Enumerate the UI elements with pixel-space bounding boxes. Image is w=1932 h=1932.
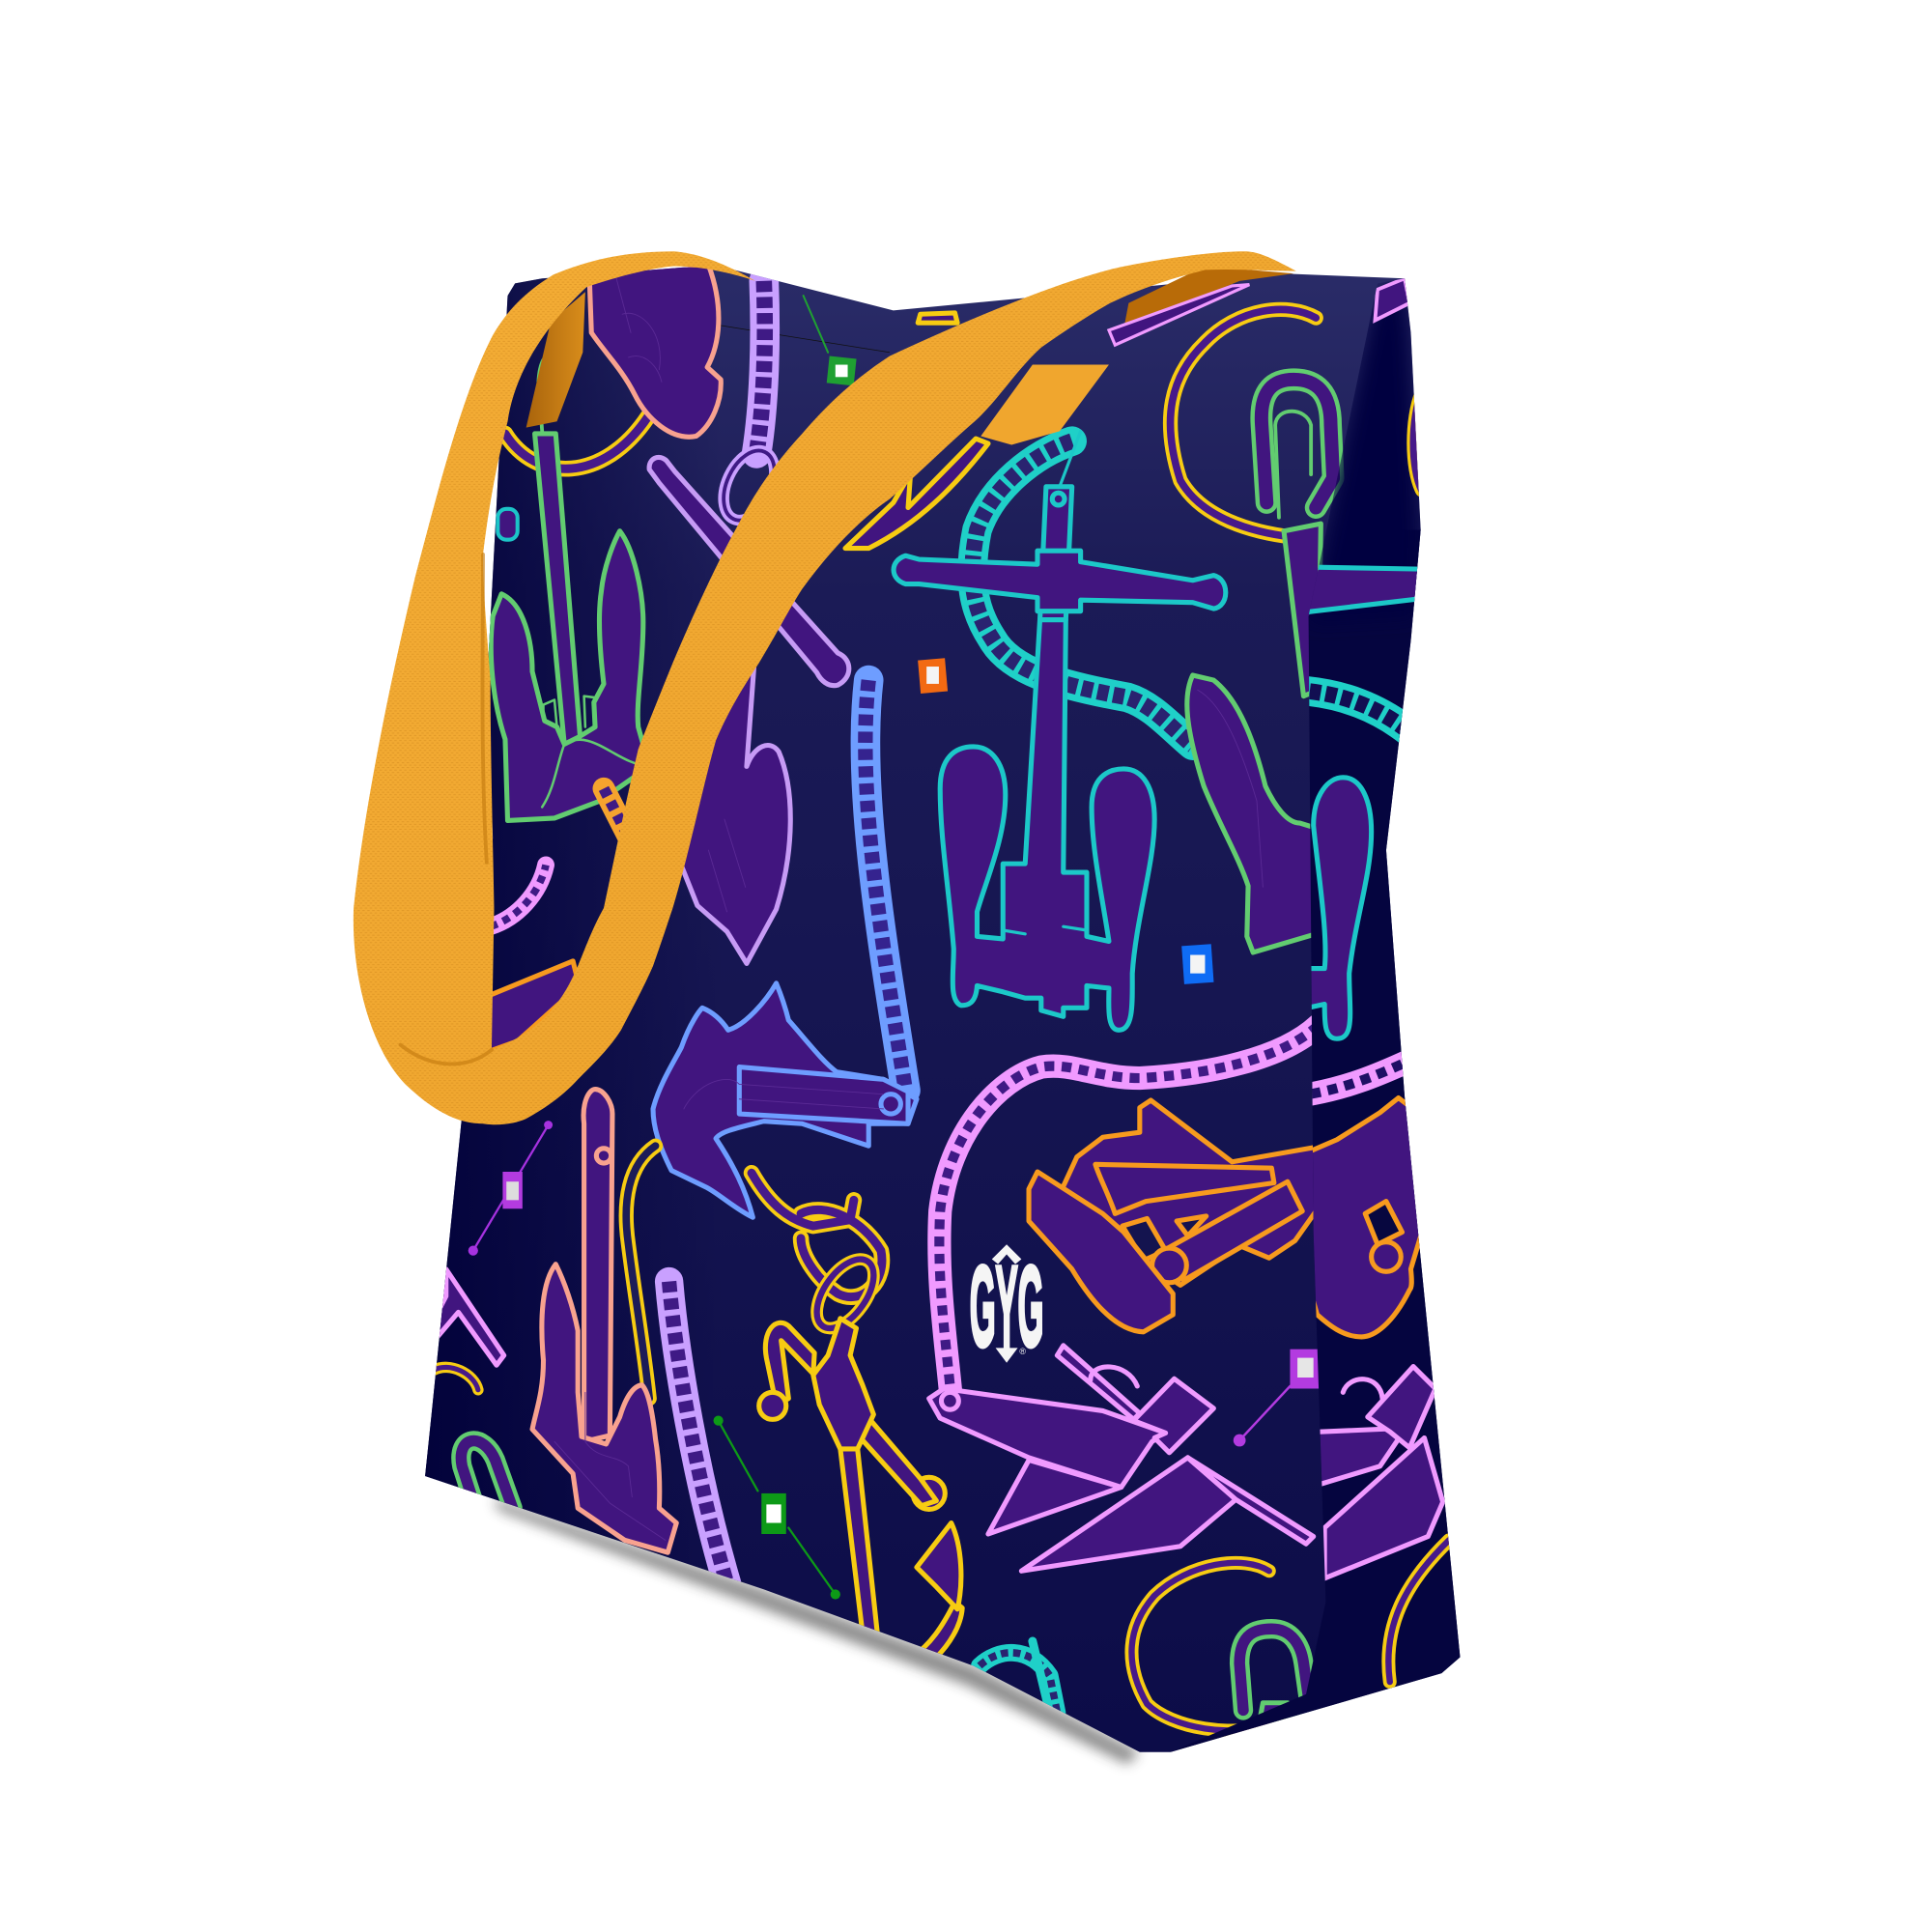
rope: gold lasso bottom (1131, 1563, 1282, 1731)
anchor: green right (1187, 675, 1316, 952)
chain: orange behind strap (604, 788, 639, 856)
side: plow anchor (1293, 1367, 1443, 1578)
anchor: lilac stock (649, 457, 849, 686)
marker: orange square (918, 658, 948, 694)
pink trim under strap (1109, 285, 1249, 345)
side: pink chain (1293, 1057, 1417, 1096)
shackle: green bottom (1239, 1629, 1309, 1722)
icon: teal link (497, 509, 518, 540)
anchor: salmon bottom (532, 1090, 676, 1552)
anchor: salmon top (589, 265, 721, 437)
chain: teal bottom knot (980, 1641, 1057, 1713)
bag front panel (425, 265, 1460, 1762)
marker: blue square (1181, 944, 1213, 984)
side: pink top (1375, 278, 1409, 321)
right strap tab (980, 365, 1109, 444)
side: gold rope bottom (1388, 1540, 1449, 1682)
chain: blue (866, 680, 905, 1091)
side: teal fluke (1296, 778, 1372, 1038)
logo: ® (1019, 1347, 1026, 1356)
logo: GYG (970, 1243, 1043, 1371)
marker: purple square left (469, 1121, 553, 1256)
rope: upper left gold (505, 416, 648, 469)
bag side gusset (1171, 278, 1460, 1752)
side: orange anchor (1293, 1097, 1430, 1337)
side: gold rope (1413, 392, 1422, 491)
marker: green bottom square (714, 1416, 840, 1600)
shackle: green bottom left (461, 1441, 513, 1508)
anchor: pink plow (929, 1346, 1314, 1571)
anchor: orange (1029, 1100, 1316, 1332)
main orange strap (354, 251, 1296, 1124)
rope: small gold (434, 1367, 478, 1390)
tote bag illustration (354, 251, 1461, 1770)
shackle: green right (1262, 380, 1333, 696)
strap underside back piece (1123, 267, 1293, 329)
front panel anchor pattern (431, 265, 1333, 1731)
side gusset anchor pattern (1293, 278, 1449, 1682)
chain: pink (939, 1025, 1319, 1399)
anchor: gold bottom (759, 1319, 962, 1658)
anchor: orange fragment (491, 958, 578, 1050)
anchor: lilac lower (672, 653, 790, 963)
side: teal stock (1293, 567, 1430, 613)
marker: purple square right (1234, 1350, 1320, 1446)
rope: gold long (626, 1146, 656, 1399)
logo (970, 1243, 1043, 1371)
top seam line (587, 304, 890, 353)
rope: gold knot (752, 1173, 885, 1338)
bag ground shadow (493, 1498, 1140, 1765)
anchor: blue (653, 983, 917, 1217)
rope: gold loop (1171, 309, 1316, 537)
chain: pink fragment (491, 865, 546, 926)
side: teal chain (1293, 690, 1410, 733)
chain: lilac top (718, 274, 781, 526)
marker: green top square (804, 296, 857, 385)
anchor: teal (894, 431, 1226, 1030)
left strap tab (526, 292, 585, 428)
chain: teal (973, 441, 1193, 746)
anchor: pink left fragment (431, 1269, 504, 1365)
anchor: green left (491, 354, 649, 820)
chain: lilac bottom (669, 1282, 727, 1583)
anchor: gold under strap (845, 313, 988, 549)
